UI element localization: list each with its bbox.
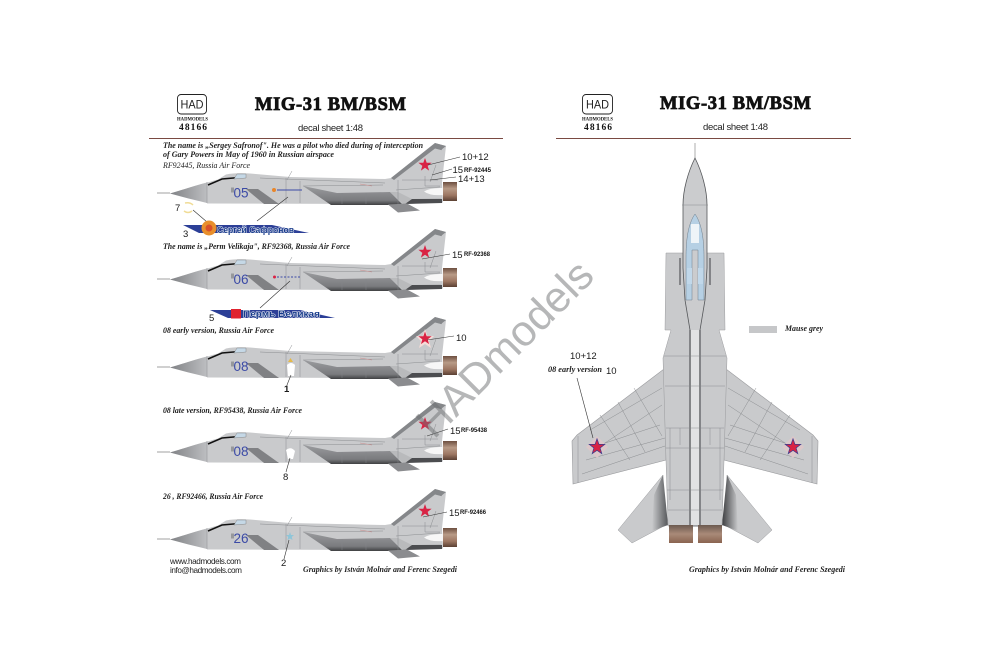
marking labels 26: 2	[281, 558, 286, 569]
caption 08 early: 08 early version, Russia Air Force	[163, 325, 274, 335]
top view labels: 10	[606, 366, 617, 377]
marking labels 05	[428, 152, 492, 185]
caption 08 late: 08 late version, RF95438, Russia Air Force	[163, 405, 302, 415]
marking labels 26: RF-92466	[460, 510, 487, 516]
caption 05	[162, 140, 423, 170]
logo: HAD: HAD	[180, 98, 204, 112]
aircraft side view 05	[157, 143, 457, 212]
logo: HAD right: HADMODELS	[582, 118, 613, 122]
logo: HAD right: HAD	[586, 98, 609, 112]
panel: aircraft 26	[157, 489, 487, 569]
contact details	[169, 557, 242, 575]
aircraft side view 06	[157, 229, 457, 298]
title: MIG-31 BM/BSM	[255, 95, 406, 115]
marking labels 05: RF-92445	[464, 168, 492, 174]
decal: pilot name banner: Сергей Сафронов	[217, 225, 294, 236]
panel: aircraft 06 Perm Velikaja	[157, 229, 491, 324]
marking labels 08 early: 1	[284, 384, 290, 395]
decal: pilot name banner	[175, 197, 309, 240]
marking labels 08 late: RF-95438	[461, 428, 488, 434]
contact details: info@hadmodels.com	[170, 566, 242, 575]
marking labels 05: 14+13	[458, 174, 485, 185]
decal: pilot name banner: 7	[175, 203, 180, 214]
wings	[572, 369, 818, 484]
decal: Perm Velikaja banner: Пермь Великая	[243, 309, 320, 319]
caption 05: RF92445, Russia Air Force	[162, 160, 250, 170]
credits right: Graphics by István Molnár and Ferenc Szegedi	[689, 564, 846, 574]
marking labels 05: 15	[452, 165, 463, 176]
decal: Perm Velikaja banner: 5	[209, 313, 214, 324]
marking labels 08 late	[283, 426, 488, 483]
logo: HAD: HADMODELS	[177, 118, 208, 122]
marking labels 06: 15	[452, 250, 463, 261]
aircraft side view 08 early	[157, 317, 457, 386]
tailplanes	[618, 475, 772, 543]
legend: Mause grey	[749, 323, 823, 333]
decal: pilot name banner: 3	[183, 229, 188, 240]
caption 05: of Gary Powers in May of 1960 in Russian airspace	[163, 149, 334, 159]
decal: Perm Velikaja banner	[209, 281, 335, 324]
panel: aircraft 05 Sergey Safronof	[157, 140, 492, 240]
legend: Mause grey: Mause grey	[784, 323, 823, 333]
top view labels: 08 early version	[548, 364, 602, 374]
canopy	[686, 214, 704, 300]
aircraft top view	[572, 143, 818, 543]
aircraft side view 08 late: 08	[234, 444, 249, 459]
marking labels 08 late: 8	[283, 472, 288, 483]
caption 06: The name is „Perm Velikaja", RF92368, Russia Air Force	[163, 241, 350, 251]
marking labels 26	[281, 508, 487, 569]
aircraft side view 05: 05	[234, 186, 249, 200]
title right: MIG-31 BM/BSM	[660, 94, 811, 114]
logo: HAD right	[582, 94, 613, 133]
caption 05: The name is „Sergey Safronof". He was a pilot who died during of interception	[163, 140, 423, 150]
nozzles	[669, 525, 722, 543]
credits left: Graphics by István Molnár and Ferenc Szegedi	[303, 564, 458, 574]
marking labels 08 late: 15	[450, 426, 461, 437]
header: right	[582, 94, 811, 133]
fuselage and intakes	[663, 143, 727, 526]
subtitle right: decal sheet 1:48	[703, 122, 768, 133]
panel: aircraft 08 early	[157, 317, 467, 395]
top view labels	[548, 351, 617, 438]
wing stars	[586, 436, 804, 458]
marking labels 08 early: 10	[456, 333, 467, 344]
top view labels: 10+12	[570, 351, 597, 362]
contact details: www.hadmodels.com	[169, 557, 241, 566]
aircraft side view 08 late	[157, 402, 457, 472]
subtitle: decal sheet 1:48	[298, 123, 363, 134]
header: left	[177, 94, 406, 134]
aircraft side view 26: 26	[234, 531, 249, 546]
logo: HAD: 48166	[179, 123, 207, 133]
divider right	[556, 138, 851, 140]
panel: aircraft 08 late	[157, 402, 488, 483]
logo: HAD right: 48166	[584, 123, 612, 133]
marking labels 08 early	[284, 333, 467, 395]
marking labels 26: 15	[449, 508, 460, 519]
aircraft side view 26	[157, 489, 457, 558]
logo: HAD	[177, 94, 208, 133]
marking labels 05: 10+12	[462, 152, 489, 163]
marking labels 06	[422, 250, 491, 261]
aircraft side view 08 early: 08	[234, 359, 249, 374]
aircraft side view 06: 06	[234, 272, 249, 287]
divider left	[149, 138, 503, 140]
watermark: HADmodels	[407, 251, 603, 447]
marking labels 06: RF-92368	[464, 252, 491, 258]
caption 26: 26 , RF92466, Russia Air Force	[162, 491, 263, 501]
